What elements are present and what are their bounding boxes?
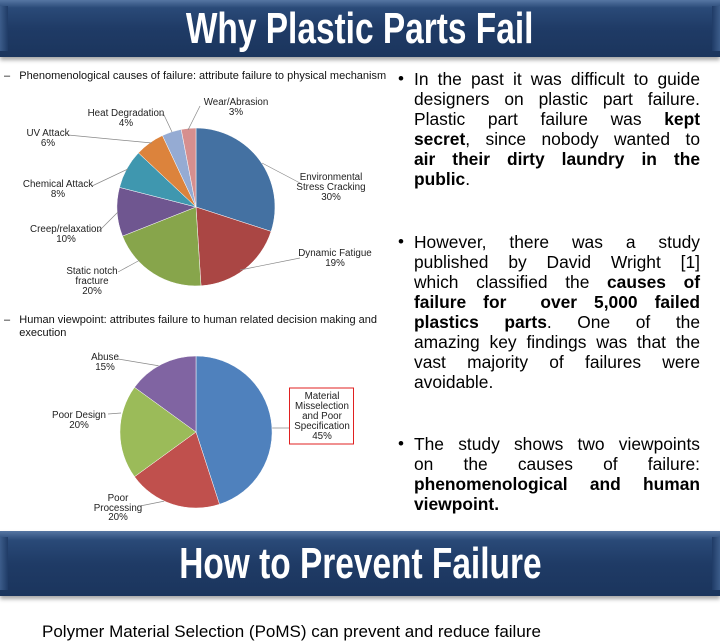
pie chart: phenomenological causes: 20%: [69, 420, 89, 431]
pie labels: Environmental: [300, 172, 362, 183]
text: bottom cut-off line: Polymer Material Selection (PoMS) can prevent and reduce failure: [42, 622, 541, 641]
pie labels: fracture: [75, 276, 109, 287]
pie labels: 20%: [82, 286, 102, 297]
text: •: [398, 69, 404, 88]
pie labels: Static notch: [66, 266, 118, 277]
pie labels: Heat Degradation: [88, 108, 164, 119]
pie labels: 19%: [325, 258, 345, 269]
pie labels: 30%: [321, 192, 341, 203]
pie chart: phenomenological causes: Abuse: [91, 352, 119, 363]
heading: phenomenological: – Phenomenological causes of failure: attribute failure to physical mechanism: [4, 70, 386, 82]
pie chart: phenomenological causes: [23, 97, 372, 523]
callout: material misselection: Specification: [294, 421, 350, 432]
text: •: [398, 434, 404, 453]
text: which classified the causes of: [414, 272, 700, 292]
pie chart: human viewpoint: [120, 356, 272, 508]
pie labels: Creep/relaxation: [30, 224, 102, 235]
text: phenomenological and human: [414, 474, 700, 494]
text: air their dirty laundry in the: [414, 149, 700, 169]
pie labels: [23, 97, 372, 297]
text block: bullet 1: [398, 69, 700, 189]
text: The study shows two viewpoints: [414, 434, 700, 454]
text: amazing key findings was that the: [414, 332, 700, 352]
text: However, there was a study: [414, 232, 700, 252]
callout: material misselection: and Poor: [302, 411, 343, 422]
callout: material misselection: Material: [305, 391, 339, 402]
text: public.: [414, 169, 470, 189]
callout: material misselection: 45%: [312, 431, 332, 442]
pie chart: phenomenological causes: 20%: [108, 512, 128, 523]
text: failure for over 5,000 failed: [414, 292, 700, 312]
pie labels: 6%: [41, 138, 55, 149]
text: •: [398, 232, 404, 251]
text block: bullet 3: [398, 434, 700, 514]
section banner: prevent failure: How to Prevent Failure: [179, 539, 541, 588]
text: designers on plastic part failure.: [414, 89, 700, 109]
section banner: prevent failure: [0, 531, 720, 596]
text: vast majority of failures were: [414, 352, 700, 372]
pie labels: 3%: [229, 107, 243, 118]
pie labels: UV Attack: [26, 128, 70, 139]
pie chart: phenomenological causes: 15%: [95, 362, 115, 373]
text: avoidable.: [414, 372, 493, 392]
callout: material misselection: [290, 388, 354, 444]
pie chart: phenomenological causes: Processing: [94, 503, 142, 514]
pie labels: Wear/Abrasion: [204, 97, 268, 108]
pie chart: phenomenological causes: Poor: [108, 493, 129, 504]
text: on the causes of failure:: [414, 454, 700, 474]
pie labels: 8%: [51, 189, 65, 200]
heading: human viewpoint: execution: [19, 327, 66, 339]
pie labels: Stress Cracking: [296, 182, 366, 193]
pie chart: phenomenological causes: Poor Design: [52, 410, 106, 421]
text: published by David Wright [1]: [414, 252, 700, 272]
pie labels: Chemical Attack: [23, 179, 93, 190]
title banner: Why Plastic Parts Fail: [186, 4, 534, 53]
text: secret, since nobody wanted to: [414, 129, 700, 149]
pie labels: 10%: [56, 234, 76, 245]
pie labels: 4%: [119, 118, 133, 129]
text: viewpoint.: [414, 494, 499, 514]
callout: material misselection: Misselection: [295, 401, 349, 412]
heading: human viewpoint: [4, 314, 377, 339]
title banner: [0, 0, 720, 57]
pie labels: Dynamic Fatigue: [298, 248, 372, 259]
text: In the past it was difficult to guide: [414, 69, 700, 89]
text: Plastic part failure was kept: [414, 109, 700, 129]
text block: bullet 2: [398, 232, 700, 392]
heading: human viewpoint: – Human viewpoint: attributes failure to human related decision making and: [4, 314, 377, 326]
text: plastics parts. One of the: [414, 312, 700, 332]
